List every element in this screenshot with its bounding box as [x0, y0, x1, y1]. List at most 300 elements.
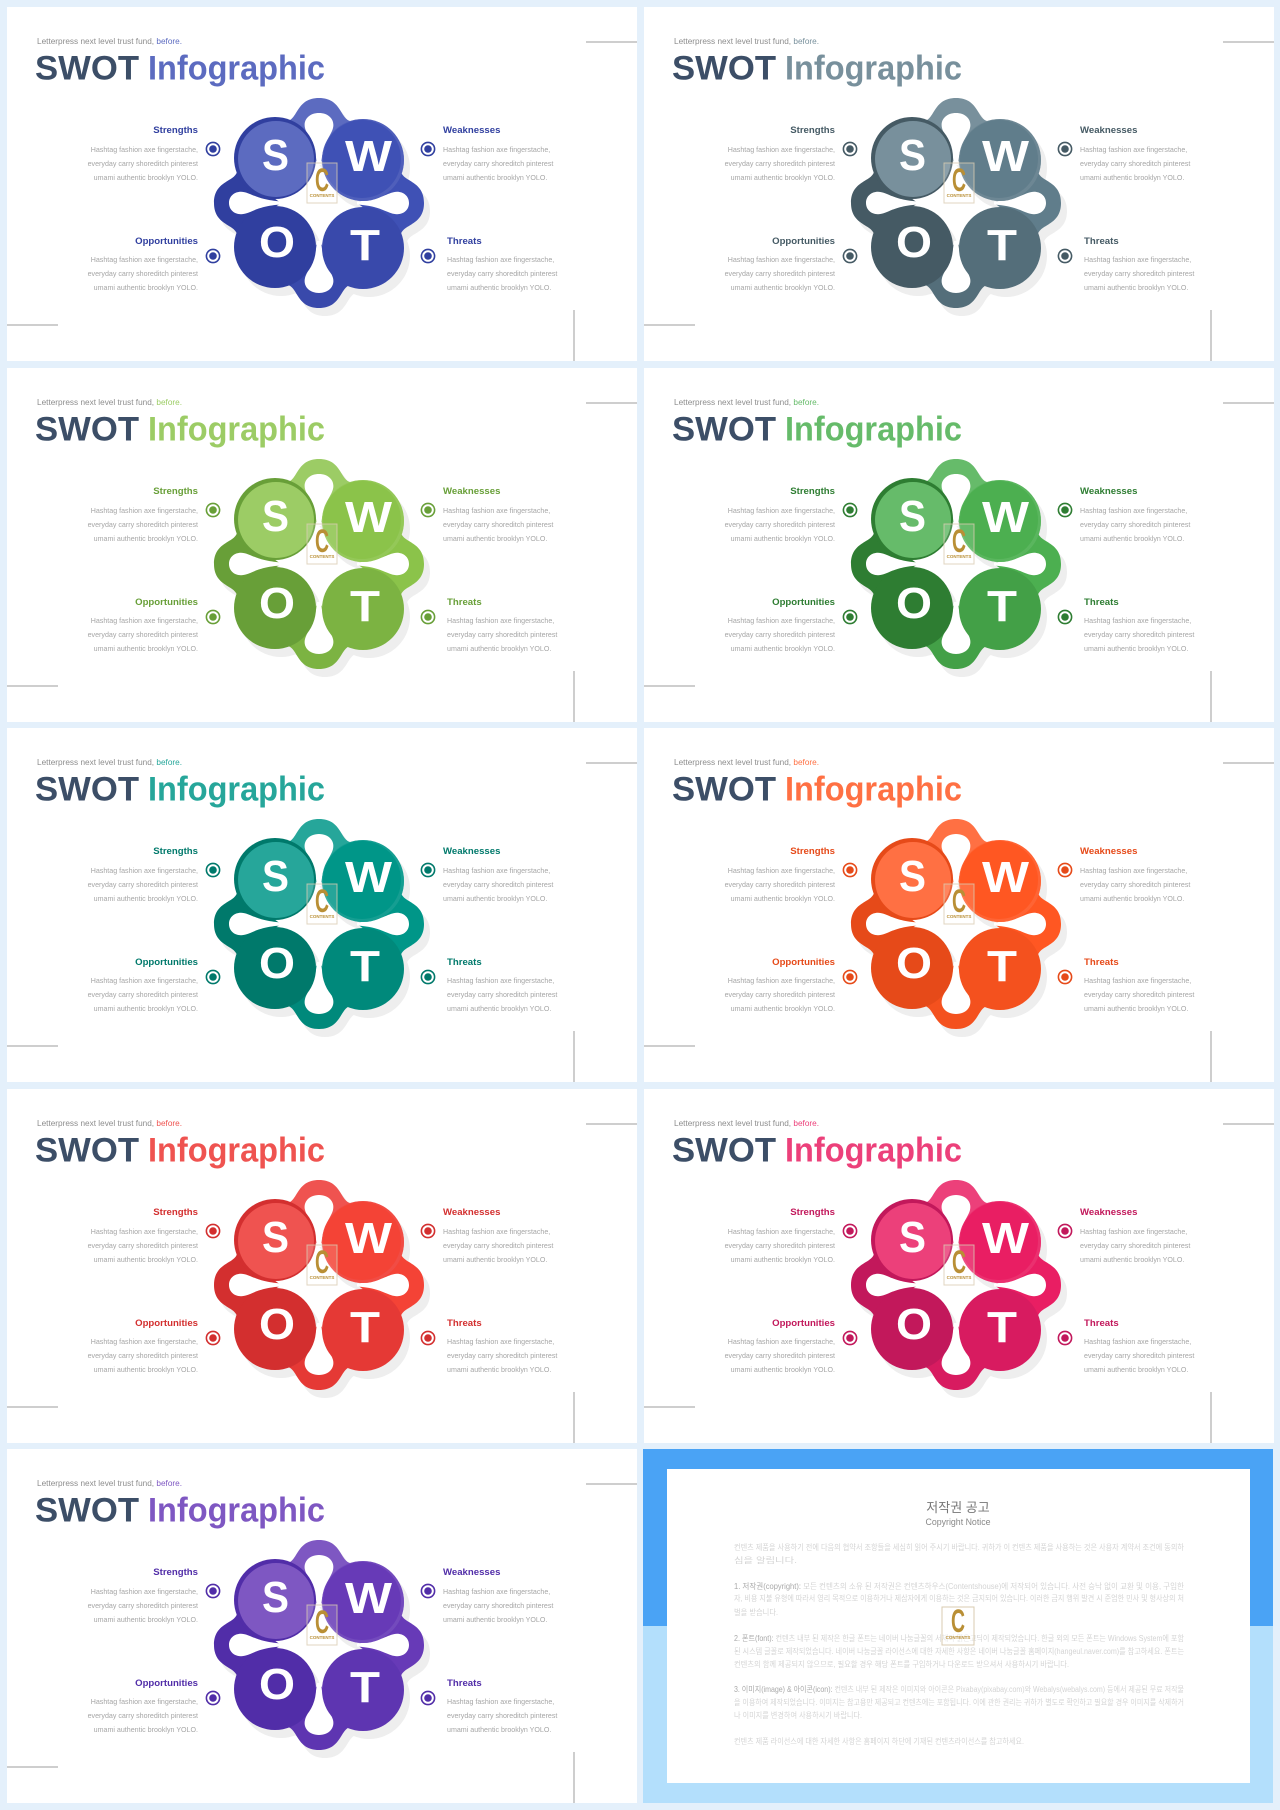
SWOT clover graphic: CONTENTS	[947, 554, 971, 559]
title: Infographic	[148, 771, 325, 809]
bullets	[843, 1224, 1072, 1344]
panel background	[644, 7, 1274, 361]
threats text: Hashtag fashion axe fingerstache,	[447, 1338, 554, 1346]
threats text: umami authentic brooklyn YOLO.	[447, 1366, 551, 1374]
threats text	[1084, 957, 1194, 1013]
SWOT clover graphic	[851, 1180, 1067, 1398]
threats text: Threats	[1084, 1318, 1119, 1329]
SWOT clover graphic: S	[899, 131, 926, 180]
weaknesses text: everyday carry shoreditch pinterest	[1080, 160, 1190, 168]
title: Infographic	[148, 1492, 325, 1530]
strengths text: everyday carry shoreditch pinterest	[88, 881, 198, 889]
title	[35, 1131, 325, 1169]
image clause: 을 이용하여 제작되었습니다. 이미지는 참고용만 제공되고 컨텐츠에는 포함됩니다. 이에 관한 권리는 귀하가 별도로 확인하고 필요할 경우 이미지를 삭제하거	[734, 1697, 1184, 1707]
strengths text: Hashtag fashion axe fingerstache,	[91, 507, 198, 515]
opportunities text: Hashtag fashion axe fingerstache,	[728, 977, 835, 985]
SWOT clover graphic: C	[315, 1604, 329, 1640]
SWOT clover graphic: W	[982, 853, 1030, 902]
threats text: umami authentic brooklyn YOLO.	[447, 1005, 551, 1013]
strengths text: Hashtag fashion axe fingerstache,	[728, 146, 835, 154]
threats text: everyday carry shoreditch pinterest	[447, 1712, 557, 1720]
threats text: Hashtag fashion axe fingerstache,	[1084, 977, 1191, 985]
strengths text: everyday carry shoreditch pinterest	[725, 521, 835, 529]
opportunities text: umami authentic brooklyn YOLO.	[731, 1366, 835, 1374]
bullets	[843, 142, 1072, 263]
weaknesses text: everyday carry shoreditch pinterest	[1080, 881, 1190, 889]
strengths text: umami authentic brooklyn YOLO.	[731, 174, 835, 182]
opportunities text: umami authentic brooklyn YOLO.	[94, 1005, 198, 1013]
opportunities text: Hashtag fashion axe fingerstache,	[728, 256, 835, 264]
threats text: Threats	[1084, 236, 1119, 247]
notice intro: 컨텐츠 제품을 사용하기 전에 다음의 협약서 조항들을 세심히 읽어 주시기 바랍니다. 귀하가 이 컨텐츠 제품을 사용하는 것은 사용자 계약서 조건에 동의하	[734, 1542, 1185, 1552]
weaknesses text: umami authentic brooklyn YOLO.	[443, 535, 547, 543]
weaknesses text: Hashtag fashion axe fingerstache,	[443, 1588, 550, 1596]
SWOT clover graphic: S	[262, 131, 289, 180]
opportunities text: Hashtag fashion axe fingerstache,	[91, 1698, 198, 1706]
strengths text: umami authentic brooklyn YOLO.	[731, 895, 835, 903]
SWOT clover graphic: T	[987, 221, 1017, 270]
opportunities text: umami authentic brooklyn YOLO.	[94, 1366, 198, 1374]
opportunities text: Opportunities	[772, 236, 835, 247]
title	[672, 771, 962, 809]
title	[35, 1492, 325, 1530]
threats text: Threats	[1084, 957, 1119, 968]
opportunities text: everyday carry shoreditch pinterest	[725, 1352, 835, 1360]
threats text	[1084, 236, 1194, 292]
weaknesses text: everyday carry shoreditch pinterest	[443, 881, 553, 889]
SWOT clover graphic: W	[345, 853, 393, 902]
watermark: CONTENTS	[946, 1635, 970, 1640]
SWOT clover graphic: T	[350, 221, 380, 270]
weaknesses text: Weaknesses	[1080, 486, 1137, 497]
threats text: Hashtag fashion axe fingerstache,	[1084, 256, 1191, 264]
SWOT clover graphic	[214, 98, 430, 316]
title: Infographic	[785, 771, 962, 809]
SWOT clover graphic: C	[952, 523, 966, 559]
opportunities text: Opportunities	[135, 1678, 198, 1689]
SWOT clover graphic: C	[315, 523, 329, 559]
SWOT clover graphic	[851, 819, 1067, 1037]
SWOT clover graphic: T	[350, 942, 380, 991]
panel background	[7, 7, 637, 361]
SWOT clover graphic: O	[896, 579, 932, 628]
strengths text	[88, 1207, 198, 1264]
opportunities text: Hashtag fashion axe fingerstache,	[728, 617, 835, 625]
SWOT clover graphic: T	[350, 1663, 380, 1712]
threats text: everyday carry shoreditch pinterest	[1084, 1352, 1194, 1360]
panel background	[644, 1089, 1274, 1443]
copyright clause: 벌을 받습니다.	[734, 1607, 778, 1617]
subtitle: Letterpress next level trust fund, before.	[674, 397, 819, 407]
threats text	[447, 597, 557, 653]
opportunities text: everyday carry shoreditch pinterest	[88, 1352, 198, 1360]
subtitle: Letterpress next level trust fund, before.	[37, 36, 182, 46]
SWOT clover graphic: CONTENTS	[310, 193, 334, 198]
SWOT clover graphic: O	[259, 1660, 295, 1709]
panel: blue-grey SWOT slide	[644, 7, 1274, 361]
threats text: Hashtag fashion axe fingerstache,	[447, 1698, 554, 1706]
strengths text: Hashtag fashion axe fingerstache,	[91, 867, 198, 875]
weaknesses text	[1080, 486, 1190, 543]
bullets	[206, 142, 435, 263]
bullets	[843, 503, 1072, 623]
title: Infographic	[148, 1131, 325, 1169]
opportunities text	[88, 236, 198, 292]
image clause: 3. 이미지(image) & 아이콘(icon): 컨텐츠 내부 된 제작은 이미지와 아이콘은 Pixabay(pixabay.com)와 Webalys(webalys.com) 등에서 제공된 무료 저작물	[734, 1684, 1184, 1694]
panel background	[7, 1449, 637, 1803]
image clause	[734, 1684, 1184, 1720]
opportunities text: everyday carry shoreditch pinterest	[725, 991, 835, 999]
opportunities text	[88, 1678, 198, 1734]
weaknesses text: everyday carry shoreditch pinterest	[443, 1242, 553, 1250]
SWOT clover graphic: T	[987, 942, 1017, 991]
bullets	[206, 864, 435, 984]
weaknesses text: Weaknesses	[443, 846, 500, 857]
license line: 컨텐츠 제품 라이선스에 대한 자세한 사항은 홈페이지 하단에 기재된 컨텐츠라이선스를 참고하세요.	[734, 1736, 1024, 1746]
threats text	[447, 957, 557, 1013]
panel background	[7, 368, 637, 722]
opportunities text: everyday carry shoreditch pinterest	[725, 631, 835, 639]
subtitle: Letterpress next level trust fund, before.	[674, 36, 819, 46]
weaknesses text: Weaknesses	[443, 486, 500, 497]
weaknesses text: umami authentic brooklyn YOLO.	[1080, 535, 1184, 543]
title: Infographic	[148, 50, 325, 88]
image clause: 나 이미지를 변경하여 사용하시기 바랍니다.	[734, 1710, 862, 1720]
opportunities text: umami authentic brooklyn YOLO.	[94, 645, 198, 653]
SWOT clover graphic: O	[259, 1300, 295, 1349]
strengths text: Strengths	[790, 125, 835, 136]
strengths text: everyday carry shoreditch pinterest	[725, 881, 835, 889]
title: SWOT	[35, 410, 139, 448]
copyright clause: 1. 저작권(copyright): 모든 컨텐츠의 소유 된 저작권은 컨텐츠하우스(Contentshouse)에 저작되어 있습니다. 사전 승낙 없이 교환 및 이용, 구입한	[734, 1581, 1185, 1591]
weaknesses text: everyday carry shoreditch pinterest	[443, 1602, 553, 1610]
font clause: 2. 폰트(font): 컨텐츠 내부 된 제작은 한글 폰트는 네이버 나눔글꼴의 서체와 맑은고딕이 제작되었습니다. 한글 외의 모든 폰트는 Windows System에 포함	[734, 1633, 1185, 1643]
SWOT clover graphic: C	[952, 883, 966, 919]
bullets	[843, 864, 1072, 984]
strengths text	[725, 486, 835, 543]
opportunities text: everyday carry shoreditch pinterest	[88, 991, 198, 999]
threats text: everyday carry shoreditch pinterest	[447, 270, 557, 278]
strengths text: Strengths	[153, 846, 198, 857]
opportunities text: everyday carry shoreditch pinterest	[88, 1712, 198, 1720]
threats text	[447, 1678, 557, 1734]
weaknesses text: umami authentic brooklyn YOLO.	[443, 174, 547, 182]
SWOT clover graphic: O	[896, 218, 932, 267]
weaknesses text: umami authentic brooklyn YOLO.	[1080, 895, 1184, 903]
strengths text	[88, 1567, 198, 1624]
opportunities text: Hashtag fashion axe fingerstache,	[91, 617, 198, 625]
weaknesses text: Weaknesses	[443, 1207, 500, 1218]
copyright clause	[734, 1581, 1185, 1617]
weaknesses text: everyday carry shoreditch pinterest	[1080, 521, 1190, 529]
SWOT clover graphic: O	[896, 1300, 932, 1349]
SWOT clover graphic: S	[262, 852, 289, 901]
weaknesses text: Weaknesses	[1080, 846, 1137, 857]
strengths text: umami authentic brooklyn YOLO.	[94, 1256, 198, 1264]
weaknesses text: Hashtag fashion axe fingerstache,	[1080, 867, 1187, 875]
title: Infographic	[785, 50, 962, 88]
weaknesses text: umami authentic brooklyn YOLO.	[1080, 174, 1184, 182]
threats text: Threats	[447, 1318, 482, 1329]
SWOT clover graphic: S	[899, 1213, 926, 1262]
threats text: umami authentic brooklyn YOLO.	[447, 284, 551, 292]
SWOT clover graphic: C	[952, 162, 966, 198]
strengths text: Strengths	[153, 1207, 198, 1218]
opportunities text: umami authentic brooklyn YOLO.	[94, 284, 198, 292]
SWOT clover graphic: C	[315, 162, 329, 198]
SWOT clover graphic	[851, 459, 1067, 677]
opportunities text: Opportunities	[772, 1318, 835, 1329]
panel background	[7, 728, 637, 1082]
SWOT clover graphic: C	[952, 1244, 966, 1280]
copyright clause: 자, 비용 지불 유형에 따라서 영리 목적으로 이용하거나 제삼자에게 이용하는 것은 금지되어 있습니다. 이러한 금지 행위 발견 시 준엄한 민사 및 형사상의 처	[734, 1593, 1184, 1603]
threats text: everyday carry shoreditch pinterest	[447, 1352, 557, 1360]
title: Infographic	[785, 1131, 962, 1169]
opportunities text: everyday carry shoreditch pinterest	[88, 270, 198, 278]
panel: indigo SWOT slide	[7, 7, 637, 361]
threats text: everyday carry shoreditch pinterest	[447, 991, 557, 999]
SWOT clover graphic: W	[982, 493, 1030, 542]
opportunities text: Hashtag fashion axe fingerstache,	[91, 256, 198, 264]
SWOT clover graphic: S	[262, 492, 289, 541]
weaknesses text: Hashtag fashion axe fingerstache,	[1080, 507, 1187, 515]
threats text: umami authentic brooklyn YOLO.	[447, 645, 551, 653]
watermark	[942, 1603, 974, 1645]
panel background	[644, 728, 1274, 1082]
threats text	[1084, 1318, 1194, 1374]
notice heading: 저작권 공고	[926, 1500, 990, 1515]
strengths text	[88, 846, 198, 903]
SWOT clover graphic: O	[896, 939, 932, 988]
weaknesses text: everyday carry shoreditch pinterest	[443, 160, 553, 168]
opportunities text: Opportunities	[772, 957, 835, 968]
opportunities text: umami authentic brooklyn YOLO.	[731, 645, 835, 653]
threats text: Hashtag fashion axe fingerstache,	[1084, 1338, 1191, 1346]
title: SWOT	[35, 1492, 139, 1530]
panel: teal SWOT slide	[7, 728, 637, 1082]
strengths text	[88, 486, 198, 543]
bullets	[206, 503, 435, 623]
panel background	[7, 1089, 637, 1443]
SWOT clover graphic: CONTENTS	[310, 554, 334, 559]
opportunities text	[725, 597, 835, 653]
weaknesses text	[443, 846, 553, 903]
strengths text: umami authentic brooklyn YOLO.	[731, 1256, 835, 1264]
threats text: Hashtag fashion axe fingerstache,	[447, 256, 554, 264]
threats text: umami authentic brooklyn YOLO.	[447, 1726, 551, 1734]
threats text: Threats	[447, 957, 482, 968]
SWOT clover graphic: O	[259, 939, 295, 988]
opportunities text	[725, 1318, 835, 1374]
subtitle: Letterpress next level trust fund, before.	[37, 397, 182, 407]
opportunities text: everyday carry shoreditch pinterest	[88, 631, 198, 639]
weaknesses text: Hashtag fashion axe fingerstache,	[1080, 146, 1187, 154]
weaknesses text: Hashtag fashion axe fingerstache,	[443, 507, 550, 515]
bullets	[206, 1224, 435, 1344]
SWOT clover graphic: O	[259, 218, 295, 267]
weaknesses text	[443, 486, 553, 543]
title	[35, 50, 325, 88]
SWOT clover graphic: S	[899, 852, 926, 901]
threats text: Threats	[447, 1678, 482, 1689]
opportunities text: umami authentic brooklyn YOLO.	[731, 284, 835, 292]
subtitle: Letterpress next level trust fund, before.	[674, 1118, 819, 1128]
weaknesses text	[443, 1567, 553, 1624]
SWOT clover graphic: S	[899, 492, 926, 541]
panel: pink SWOT slide	[644, 1089, 1274, 1443]
strengths text: umami authentic brooklyn YOLO.	[731, 535, 835, 543]
panel background	[644, 368, 1274, 722]
strengths text: Strengths	[153, 486, 198, 497]
notice intro	[734, 1542, 1185, 1565]
strengths text: Strengths	[153, 1567, 198, 1578]
weaknesses text: Hashtag fashion axe fingerstache,	[1080, 1228, 1187, 1236]
SWOT clover graphic: CONTENTS	[310, 1275, 334, 1280]
subtitle: Letterpress next level trust fund, before.	[674, 757, 819, 767]
weaknesses text: Hashtag fashion axe fingerstache,	[443, 146, 550, 154]
weaknesses text: umami authentic brooklyn YOLO.	[443, 895, 547, 903]
SWOT clover graphic	[214, 819, 430, 1037]
title: Infographic	[785, 410, 962, 448]
threats text: everyday carry shoreditch pinterest	[447, 631, 557, 639]
strengths text: everyday carry shoreditch pinterest	[88, 1242, 198, 1250]
SWOT clover graphic: T	[350, 1303, 380, 1352]
SWOT clover graphic: W	[982, 132, 1030, 181]
notice intro: 심을 알립니다.	[734, 1555, 797, 1565]
weaknesses text: umami authentic brooklyn YOLO.	[443, 1256, 547, 1264]
weaknesses text: Weaknesses	[1080, 125, 1137, 136]
title	[35, 410, 325, 448]
weaknesses text	[1080, 846, 1190, 903]
title	[672, 410, 962, 448]
SWOT clover graphic: C	[315, 883, 329, 919]
opportunities text: everyday carry shoreditch pinterest	[725, 270, 835, 278]
strengths text: umami authentic brooklyn YOLO.	[94, 174, 198, 182]
strengths text: Hashtag fashion axe fingerstache,	[728, 1228, 835, 1236]
strengths text: umami authentic brooklyn YOLO.	[94, 1616, 198, 1624]
SWOT clover graphic: CONTENTS	[947, 193, 971, 198]
SWOT clover graphic: T	[987, 1303, 1017, 1352]
opportunities text	[725, 957, 835, 1013]
opportunities text: Opportunities	[135, 1318, 198, 1329]
watermark: C	[951, 1603, 965, 1639]
threats text: umami authentic brooklyn YOLO.	[1084, 645, 1188, 653]
SWOT clover graphic: CONTENTS	[310, 914, 334, 919]
SWOT clover graphic: W	[982, 1214, 1030, 1263]
opportunities text: umami authentic brooklyn YOLO.	[731, 1005, 835, 1013]
strengths text: Strengths	[790, 1207, 835, 1218]
font clause	[734, 1633, 1185, 1669]
opportunities text	[725, 236, 835, 292]
title	[35, 771, 325, 809]
threats text	[1084, 597, 1194, 653]
title: SWOT	[35, 1131, 139, 1169]
weaknesses text	[443, 1207, 553, 1264]
strengths text: Hashtag fashion axe fingerstache,	[728, 867, 835, 875]
weaknesses text: Hashtag fashion axe fingerstache,	[443, 867, 550, 875]
threats text	[447, 1318, 557, 1374]
SWOT clover graphic: S	[262, 1573, 289, 1622]
threats text: everyday carry shoreditch pinterest	[1084, 631, 1194, 639]
SWOT clover graphic	[214, 1180, 430, 1398]
SWOT clover graphic	[214, 1540, 430, 1758]
strengths text: Strengths	[153, 125, 198, 136]
strengths text: Strengths	[790, 846, 835, 857]
threats text	[447, 236, 557, 292]
panel: copyright notice	[643, 1449, 1273, 1803]
strengths text: umami authentic brooklyn YOLO.	[94, 535, 198, 543]
title: SWOT	[672, 771, 776, 809]
strengths text: Hashtag fashion axe fingerstache,	[91, 1588, 198, 1596]
frame background	[643, 1449, 1273, 1803]
threats text: umami authentic brooklyn YOLO.	[1084, 1005, 1188, 1013]
threats text: everyday carry shoreditch pinterest	[1084, 991, 1194, 999]
opportunities text: Hashtag fashion axe fingerstache,	[91, 977, 198, 985]
subtitle: Letterpress next level trust fund, before.	[37, 757, 182, 767]
strengths text: everyday carry shoreditch pinterest	[88, 521, 198, 529]
title: SWOT	[35, 771, 139, 809]
SWOT clover graphic: S	[262, 1213, 289, 1262]
strengths text	[725, 1207, 835, 1264]
opportunities text: Opportunities	[772, 597, 835, 608]
panel: red SWOT slide	[7, 1089, 637, 1443]
opportunities text: Opportunities	[135, 597, 198, 608]
SWOT clover graphic: C	[315, 1244, 329, 1280]
font clause: 된 시스템 글꼴로 제작되었습니다. 네이버 나눔글꼴 라이선스에 대한 자세한 사항은 네이버 나눔글꼴 홈페이지(hangeul.naver.com)를 참고하세요. 폰트는	[734, 1646, 1184, 1656]
threats text: everyday carry shoreditch pinterest	[1084, 270, 1194, 278]
strengths text: Hashtag fashion axe fingerstache,	[728, 507, 835, 515]
weaknesses text: Hashtag fashion axe fingerstache,	[443, 1228, 550, 1236]
title: SWOT	[672, 50, 776, 88]
weaknesses text	[1080, 1207, 1190, 1264]
opportunities text	[88, 597, 198, 653]
strengths text	[88, 125, 198, 182]
threats text: Hashtag fashion axe fingerstache,	[447, 977, 554, 985]
weaknesses text: Weaknesses	[443, 125, 500, 136]
notice subheading: Copyright Notice	[925, 1517, 991, 1527]
strengths text: Hashtag fashion axe fingerstache,	[91, 1228, 198, 1236]
title: Infographic	[148, 410, 325, 448]
title: SWOT	[672, 1131, 776, 1169]
strengths text: Strengths	[790, 486, 835, 497]
weaknesses text: umami authentic brooklyn YOLO.	[443, 1616, 547, 1624]
weaknesses text: everyday carry shoreditch pinterest	[1080, 1242, 1190, 1250]
SWOT clover graphic: CONTENTS	[947, 1275, 971, 1280]
threats text: umami authentic brooklyn YOLO.	[1084, 1366, 1188, 1374]
strengths text: everyday carry shoreditch pinterest	[88, 160, 198, 168]
opportunities text: Opportunities	[135, 236, 198, 247]
strengths text: umami authentic brooklyn YOLO.	[94, 895, 198, 903]
bullets	[206, 1585, 435, 1705]
opportunities text	[88, 1318, 198, 1374]
panel: orange SWOT slide	[644, 728, 1274, 1082]
panel: light green SWOT slide	[7, 368, 637, 722]
subtitle: Letterpress next level trust fund, before.	[37, 1478, 182, 1488]
weaknesses text	[1080, 125, 1190, 182]
SWOT clover graphic: O	[259, 579, 295, 628]
SWOT clover graphic: W	[345, 1574, 393, 1623]
weaknesses text: Weaknesses	[443, 1567, 500, 1578]
weaknesses text: umami authentic brooklyn YOLO.	[1080, 1256, 1184, 1264]
title: SWOT	[672, 410, 776, 448]
SWOT clover graphic: CONTENTS	[310, 1635, 334, 1640]
title	[672, 50, 962, 88]
font clause: 컨텐츠의 함께 제공되지 않으므로, 필요할 경우 해당 폰트를 구입하거나 다운로드 받으셔서 사용하시기 바랍니다.	[734, 1659, 1069, 1669]
weaknesses text: everyday carry shoreditch pinterest	[443, 521, 553, 529]
strengths text: everyday carry shoreditch pinterest	[88, 1602, 198, 1610]
panel: green SWOT slide	[644, 368, 1274, 722]
strengths text: everyday carry shoreditch pinterest	[725, 160, 835, 168]
